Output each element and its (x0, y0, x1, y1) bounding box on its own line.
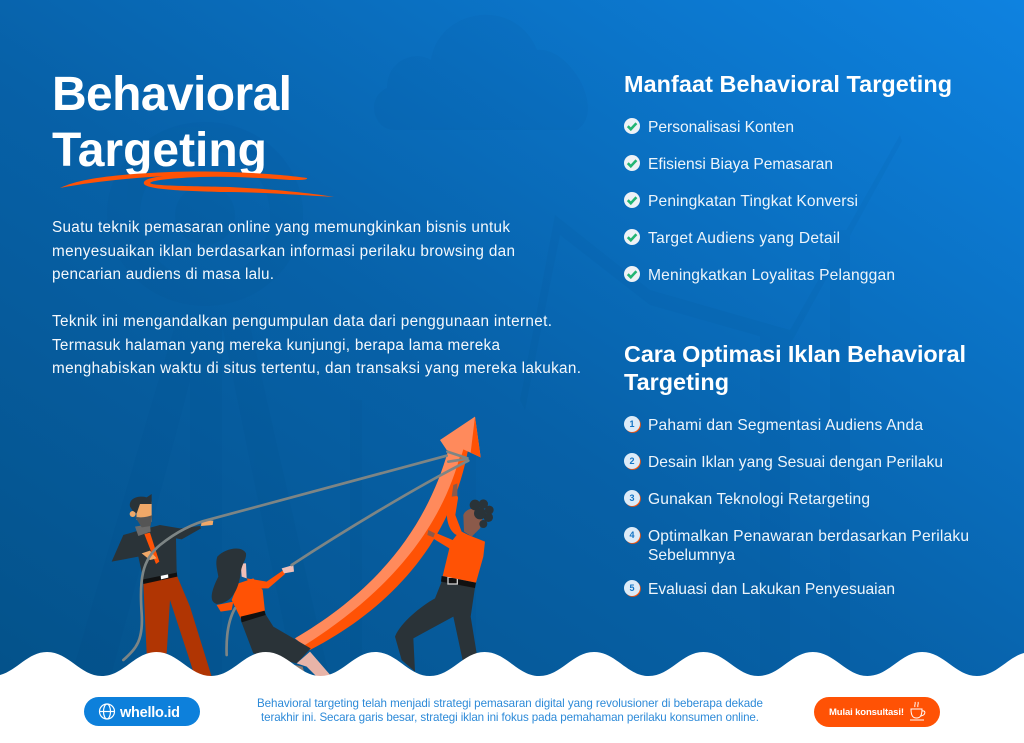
step 5: 5 (629, 583, 635, 593)
title: Behavioral (52, 68, 292, 121)
step 4: Optimalkan Penawaran berdasarkan Perilaku (648, 528, 969, 545)
illustration: people pulling arrow (112, 417, 494, 677)
step 3: 3 (629, 493, 635, 503)
step 2: 2 (629, 456, 635, 466)
growth arrow (295, 417, 481, 650)
intro paragraph 2 (52, 313, 581, 377)
step 2: Desain Iklan yang Sesuai dengan Perilaku (648, 454, 943, 471)
list: cara optimasi (624, 416, 969, 598)
item 2: Efisiensi Biaya Pemasaran (648, 156, 833, 173)
step 1: 1 (629, 419, 635, 429)
intro paragraph 1: pencarian audiens di masa lalu. (52, 266, 274, 283)
title: Targeting (52, 124, 267, 177)
heading: cara optimasi: Cara Optimasi Iklan Behavioral (624, 341, 966, 367)
item 4: Target Audiens yang Detail (648, 230, 840, 247)
intro paragraph 2: Teknik ini mengandalkan pengumpulan data dari penggunaan internet. (52, 313, 552, 330)
man with beard (112, 494, 213, 677)
intro paragraph 2: menghabiskan waktu di situs tertentu, dan transaksi yang mereka lakukan. (52, 360, 581, 377)
heading: cara optimasi (624, 341, 966, 395)
faint background motifs (70, 15, 902, 680)
title underline brush stroke (60, 171, 334, 197)
title (52, 68, 334, 197)
icon: coffee cup (910, 702, 925, 720)
wave footer background (0, 652, 1024, 743)
step 4: Sebelumnya (648, 547, 735, 564)
intro paragraph 1: Suatu teknik pemasaran online yang memungkinkan bisnis untuk (52, 219, 510, 236)
step 4: 4 (629, 530, 635, 540)
consultation button (814, 697, 940, 727)
item 1: Personalisasi Konten (648, 119, 794, 136)
footer description (257, 697, 763, 724)
item 3: Peningkatan Tingkat Konversi (648, 193, 858, 210)
footer description: terakhir ini. Secara garis besar, strategi iklan ini fokus pada pemahaman perilaku konsumen online. (261, 711, 759, 724)
step 1: Pahami dan Segmentasi Audiens Anda (648, 417, 923, 434)
ropes (123, 452, 468, 660)
icon: globe (100, 704, 114, 719)
list: manfaat (624, 118, 895, 284)
woman (212, 549, 332, 677)
intro paragraph 1: menyesuaikan iklan berdasarkan informasi perilaku browsing dan (52, 243, 515, 260)
step 5: Evaluasi dan Lakukan Penyesuaian (648, 581, 895, 598)
step 4 (624, 527, 969, 564)
heading: manfaat: Manfaat Behavioral Targeting (624, 71, 952, 97)
step 3: Gunakan Teknologi Retargeting (648, 491, 870, 508)
heading: cara optimasi: Targeting (624, 369, 729, 395)
consultation button: Mulai konsultasi! (829, 707, 904, 718)
item 5: Meningkatkan Loyalitas Pelanggan (648, 267, 895, 284)
intro paragraph 2: Termasuk halaman yang mereka kunjungi, berapa lama mereka (52, 337, 500, 354)
website badge (84, 697, 200, 726)
man with curly hair (395, 483, 494, 672)
intro paragraph 1 (52, 219, 515, 283)
website badge: whello.id (119, 705, 180, 721)
footer description: Behavioral targeting telah menjadi strategi pemasaran digital yang revolusioner di beberapa dekade (257, 697, 763, 710)
